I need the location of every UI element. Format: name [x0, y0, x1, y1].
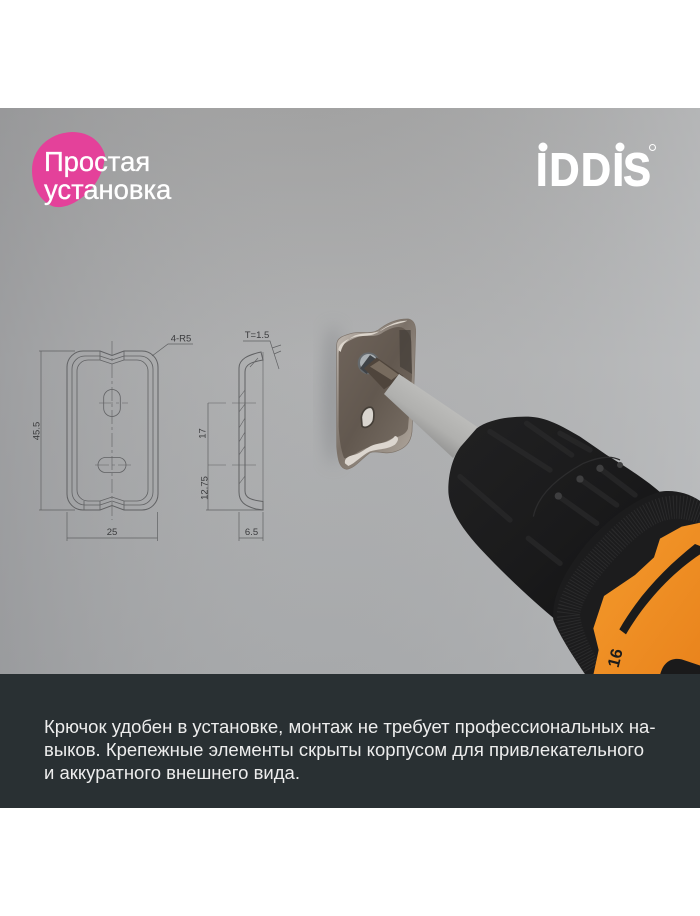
- technical drawing: side view labels: 12.75: [200, 476, 210, 500]
- panel: description bar: [0, 674, 700, 808]
- technical drawing: side view: [206, 341, 281, 541]
- technical drawing: side view labels: [198, 330, 269, 538]
- description text: Крючок удобен в установке, монтаж не требует профессиональных на-: [44, 716, 656, 737]
- drill chuck: [448, 417, 663, 623]
- drill collar: [553, 491, 700, 677]
- technical drawing: front view labels: 4-R5: [171, 334, 191, 344]
- technical drawing: front view: [39, 341, 193, 541]
- bracket shadow: [323, 325, 343, 465]
- drill orange body: [593, 522, 700, 675]
- technical drawing: front view labels: 45.5: [32, 422, 42, 440]
- drill orange body: 16: [604, 647, 627, 669]
- metal bracket on wall: [337, 319, 416, 469]
- description text: и аккуратного внешнего вида.: [44, 762, 300, 783]
- description text: выков. Крепежные элементы скрыты корпусом для привлекательного: [44, 739, 644, 760]
- description text: [44, 716, 656, 783]
- drill bit and screw: [358, 352, 403, 389]
- panel: wall photo with drill: [0, 108, 700, 674]
- heading: установка: [44, 174, 171, 205]
- technical drawing: side view labels: 17: [198, 428, 208, 439]
- technical drawing: front view labels: [32, 334, 191, 538]
- badge: pink blob: [32, 132, 105, 208]
- heading: Простая: [44, 146, 150, 177]
- drill shaft: [384, 374, 478, 458]
- technical drawing: front view labels: 25: [107, 527, 117, 538]
- heading: [44, 146, 172, 206]
- technical drawing: side view labels: T=1.5: [245, 330, 269, 341]
- technical drawing: side view labels: 6.5: [245, 527, 258, 538]
